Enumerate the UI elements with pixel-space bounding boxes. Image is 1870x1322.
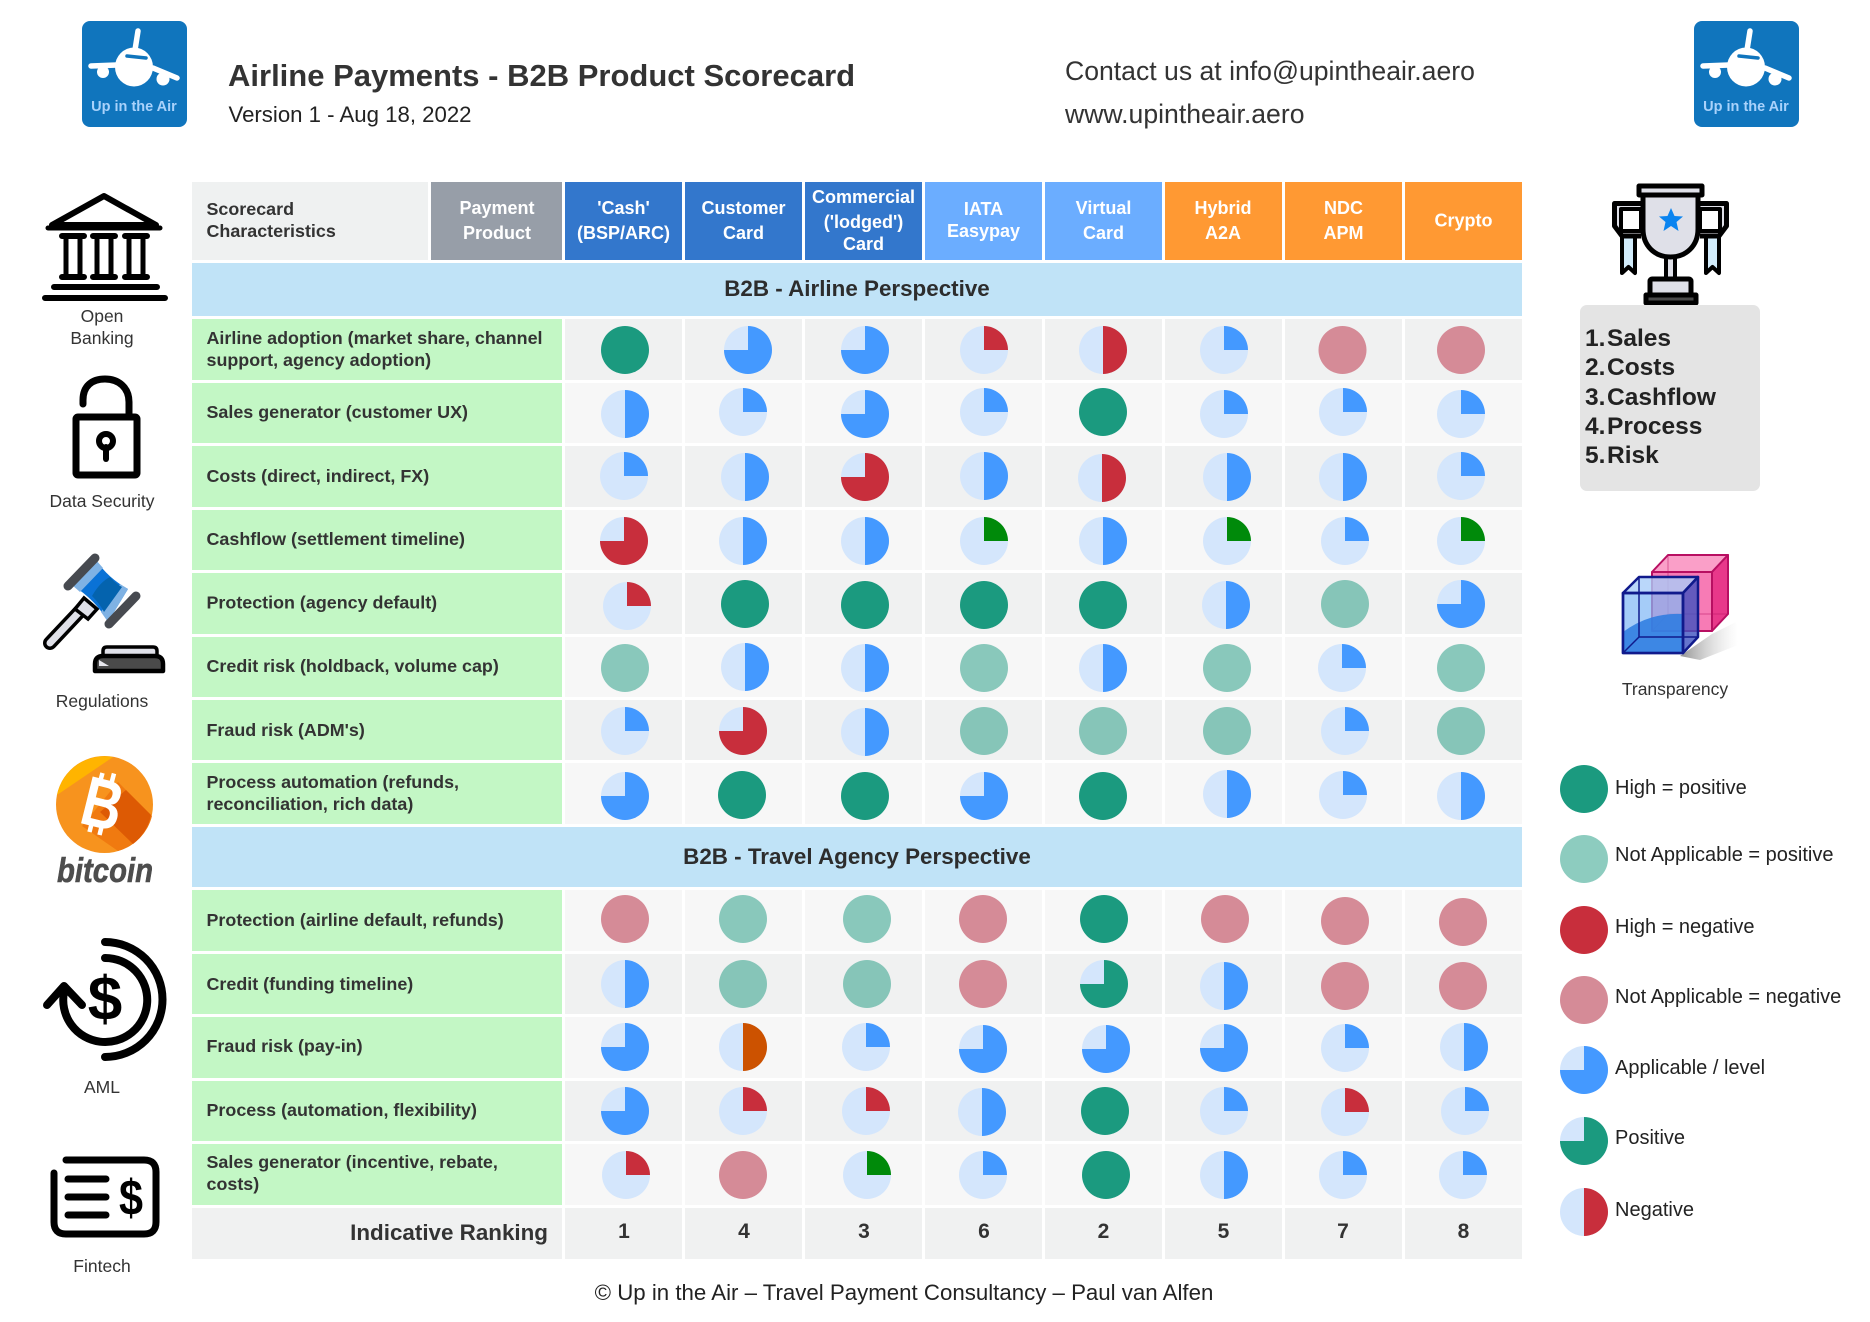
legend item: Not Applicable = positive: Not Applicable = positive (1615, 844, 1833, 866)
pie: high positive (601, 326, 649, 374)
pie: quarter level (1200, 326, 1248, 374)
pie: three quarter level (841, 326, 889, 374)
row: Indicative Ranking: 6 (978, 1220, 990, 1243)
pie: not applicable positive (1437, 707, 1485, 755)
header: Hybrid A2A: Hybrid (1194, 198, 1252, 218)
legend item: Not Applicable = positive (1560, 835, 1833, 883)
caption: Transparency: Transparency (1622, 679, 1728, 699)
icon: transparency cubes (1623, 555, 1738, 660)
pie: half negative (1079, 326, 1127, 374)
subtitle: version: Version 1 - Aug 18, 2022 (228, 102, 472, 127)
pie: high positive (718, 771, 766, 819)
pie: half level (601, 390, 649, 438)
pie: not applicable negative (601, 895, 649, 943)
pie: quarter level (1321, 1024, 1369, 1072)
pie: quarter negative (719, 1087, 767, 1135)
header: IATA Easypay: IATA (964, 199, 1003, 219)
pie: high positive (1081, 1087, 1129, 1135)
header: NDC APM: NDC (1324, 198, 1363, 218)
pie: half level (1202, 581, 1250, 629)
pie: not applicable negative (959, 895, 1007, 943)
row: Process automation flexibility: Process (automation, flexibility) (206, 1100, 477, 1120)
pie: not applicable positive (1203, 644, 1251, 692)
logo: Up in the Air (right) (1694, 21, 1799, 127)
pie: three quarter level (601, 772, 649, 820)
header: Cash: 'Cash' (597, 198, 650, 218)
pie: not applicable positive (843, 960, 891, 1008)
panel: criteria list: 2. (1585, 354, 1605, 381)
pie: not applicable negative (1201, 895, 1249, 943)
pie: quarter level (1437, 390, 1485, 438)
pie: half level (958, 1088, 1006, 1136)
pie: three quarter level (1082, 1025, 1130, 1073)
row: Airline adoption (192, 319, 1522, 380)
pie: quarter negative (602, 1151, 650, 1199)
pie: not applicable positive (1203, 707, 1251, 755)
legend item: Negative (1560, 1188, 1694, 1236)
panel: criteria list: 1. (1585, 325, 1605, 352)
icon: fintech: $ (119, 1170, 143, 1226)
row: Fraud risk pay-in (192, 1017, 1522, 1078)
icon: data security (76, 379, 137, 475)
pie: quarter level (959, 1151, 1007, 1199)
pie: high positive (841, 772, 889, 820)
pie: quarter level (600, 452, 648, 500)
icon: bitcoin: B (74, 761, 132, 847)
pie: high positive (1079, 772, 1127, 820)
pie: not applicable positive (601, 644, 649, 692)
row: Indicative Ranking: 1 (618, 1220, 630, 1243)
header: Payment Product (431, 182, 562, 260)
caption: Regulations: Regulations (56, 691, 148, 711)
row: Airline adoption: support, agency adoption) (206, 350, 431, 370)
pie: half level (841, 517, 889, 565)
header: Scorecard Characteristics: Scorecard (206, 199, 294, 219)
pie: quarter level (1321, 707, 1369, 755)
header: Payment Product: Payment (459, 198, 535, 218)
pie: quarter level (1441, 1087, 1489, 1135)
pie: three quarter level (601, 1023, 649, 1071)
panel: criteria list: 3. (1585, 384, 1605, 411)
pie: not applicable positive (1321, 580, 1369, 628)
row: Sales generator incentive (192, 1144, 1522, 1205)
caption: Open Banking: Open (81, 306, 123, 326)
pie: half level (841, 708, 889, 756)
row: Fraud risk ADM (192, 700, 1522, 760)
header: Crypto (1405, 182, 1522, 260)
pie: not applicable negative (1439, 962, 1487, 1010)
logo: Up in the Air (left) (82, 21, 187, 127)
caption: Fintech: Fintech (73, 1256, 131, 1276)
row: Costs: Costs (direct, indirect, FX) (206, 466, 429, 486)
pie: not applicable negative (1321, 897, 1369, 945)
pie: half level (1079, 644, 1127, 692)
pie: three quarter positive (1080, 960, 1128, 1008)
header: Hybrid A2A (1165, 182, 1282, 260)
pie: half level (721, 453, 769, 501)
row: Sales generator incentive: Sales generator (incentive, rebate, (206, 1152, 498, 1172)
row: Process automation: reconciliation, rich data) (206, 794, 413, 814)
pie: not applicable positive (1079, 707, 1127, 755)
pie: quarter positive (843, 1151, 891, 1199)
row: Credit funding timeline (192, 954, 1522, 1014)
pie: not applicable negative (1318, 326, 1366, 374)
legend item: High = positive: High = positive (1615, 777, 1747, 799)
pie: half level (1203, 453, 1251, 501)
row: Fraud risk pay-in: Fraud risk (pay-in) (206, 1036, 363, 1056)
pie: high positive (1079, 388, 1127, 436)
pie: not applicable positive (1437, 644, 1485, 692)
pie: three quarter level (724, 326, 772, 374)
panel: criteria list: Process (1607, 413, 1702, 440)
row: Protection airline default: Protection (airline default, refunds) (206, 910, 504, 930)
header: Customer Card: Card (723, 223, 764, 243)
row: Protection agency default: Protection (agency default) (206, 592, 437, 612)
panel: criteria list: Costs (1607, 354, 1675, 381)
pie: not applicable negative (959, 960, 1007, 1008)
legend item: High = negative (1560, 906, 1755, 954)
section band: B2B - Airline Perspective (192, 263, 1522, 316)
pie: not applicable positive (843, 895, 891, 943)
pie: quarter level (842, 1023, 890, 1071)
pie: high positive (960, 581, 1008, 629)
pie: half level (601, 960, 649, 1008)
section band: B2B - Airline Perspective: B2B - Airline Perspective (724, 276, 990, 301)
pie: half orange (719, 1023, 767, 1071)
header: Commercial lodged Card: ('lodged') (824, 212, 903, 232)
icon: open banking (45, 196, 165, 298)
legend item: High = positive (1560, 765, 1747, 813)
header: Virtual Card (1045, 182, 1162, 260)
pie: half level (1079, 517, 1127, 565)
header row (192, 182, 1522, 260)
pie: half level (841, 644, 889, 692)
pie: high positive (721, 580, 769, 628)
pie: quarter level (1319, 771, 1367, 819)
row: Sales generator: Sales generator (customer UX) (206, 402, 468, 422)
pie: half level (1200, 1151, 1248, 1199)
website: www.upintheair.aero (1064, 99, 1304, 129)
pie: quarter level (1321, 517, 1369, 565)
pie: quarter positive (960, 517, 1008, 565)
caption: Open Banking: Banking (70, 328, 134, 348)
pie: three quarter negative (600, 517, 648, 565)
logo: Up in the Air (right): Up in the Air (1703, 99, 1789, 115)
legend item: Positive (1560, 1117, 1685, 1165)
pie: half level (1203, 770, 1251, 818)
header: Payment Product: Product (463, 223, 531, 243)
row: Airline adoption: Airline adoption (market share, channel (206, 328, 543, 348)
row: Credit funding timeline: Credit (funding timeline) (206, 974, 413, 994)
row: Process automation flexibility (192, 1081, 1522, 1141)
legend item: Not Applicable = negative (1560, 976, 1841, 1024)
pie: half level (1200, 962, 1248, 1010)
row: Indicative Ranking: Indicative Ranking (350, 1220, 548, 1245)
pie: three quarter level (841, 390, 889, 438)
legend item: Positive: Positive (1615, 1127, 1685, 1149)
pie: three quarter negative (841, 453, 889, 501)
pie: not applicable negative (1439, 898, 1487, 946)
pie: half level (1440, 1023, 1488, 1071)
row: Fraud risk ADM: Fraud risk (ADM's) (206, 720, 365, 740)
icon: fintech (54, 1160, 156, 1234)
pie: high positive (1079, 581, 1127, 629)
footer credit: © Up in the Air – Travel Payment Consultancy – Paul van Alfen (595, 1280, 1213, 1305)
legend (1560, 765, 1841, 1236)
header: Virtual Card: Virtual (1076, 198, 1131, 218)
pie: high positive (1082, 1151, 1130, 1199)
pie: high positive (1080, 895, 1128, 943)
icon: AML: $ (88, 965, 122, 1034)
contact email: Contact us at info@upintheair.aero (1065, 56, 1475, 86)
pie: three quarter level (1437, 580, 1485, 628)
pie: not applicable positive (960, 644, 1008, 692)
icon: bitcoin: bitcoin (57, 852, 153, 890)
caption: AML: AML (84, 1077, 120, 1097)
row: Protection agency default (192, 573, 1522, 634)
row: Costs (192, 446, 1522, 507)
header: Commercial lodged Card: Card (843, 234, 884, 254)
pie: quarter level (601, 707, 649, 755)
pie: high positive (841, 581, 889, 629)
header: Cash (565, 182, 682, 260)
pie: quarter level (1437, 452, 1485, 500)
row: Credit risk: Credit risk (holdback, volume cap) (206, 656, 499, 676)
pie: quarter negative (842, 1087, 890, 1135)
panel: criteria list: Cashflow (1607, 384, 1717, 411)
pie: half level (719, 517, 767, 565)
title: Airline Payments - B2B Product Scorecard (228, 58, 855, 93)
pie: quarter negative (1321, 1088, 1369, 1136)
row: Indicative Ranking (192, 1208, 1522, 1259)
panel: criteria list: Sales (1607, 325, 1671, 352)
pie: not applicable positive (719, 895, 767, 943)
caption: Data Security: Data Security (49, 491, 155, 511)
pie: not applicable negative (1437, 326, 1485, 374)
pie: three quarter level (960, 772, 1008, 820)
icon: AML (47, 942, 162, 1057)
pie: half level (721, 643, 769, 691)
pie: quarter level (960, 388, 1008, 436)
row: Sales generator incentive: costs) (206, 1174, 259, 1194)
row: Indicative Ranking: 8 (1458, 1220, 1470, 1243)
row: Protection airline default (192, 890, 1522, 951)
row: Process automation: Process automation (refunds, (206, 772, 459, 792)
pie: not applicable positive (719, 960, 767, 1008)
pie: quarter level (1439, 1151, 1487, 1199)
logo: Up in the Air (left): Up in the Air (91, 99, 177, 115)
header: Scorecard Characteristics: Characteristics (206, 221, 336, 241)
row: Credit risk (192, 637, 1522, 697)
header: Hybrid A2A: A2A (1205, 223, 1241, 243)
row: Indicative Ranking: 3 (858, 1220, 870, 1243)
header: Crypto: Crypto (1434, 210, 1493, 230)
pie: three quarter level (601, 1087, 649, 1135)
icon: trophy (1614, 186, 1726, 303)
legend item: Applicable / level: Applicable / level (1615, 1057, 1765, 1079)
legend item: High = negative: High = negative (1615, 916, 1755, 938)
panel: criteria list: 4. (1585, 413, 1605, 440)
pie: quarter level (1318, 644, 1366, 692)
header: Customer Card: Customer (701, 198, 786, 218)
panel: criteria list (1580, 305, 1760, 491)
header: NDC APM: APM (1324, 223, 1364, 243)
pie: quarter negative (960, 326, 1008, 374)
pie: half negative (1078, 454, 1126, 502)
pie: quarter level (1319, 1151, 1367, 1199)
header: IATA Easypay (925, 182, 1042, 260)
pie: quarter positive (1437, 517, 1485, 565)
icon: bitcoin (56, 756, 153, 890)
legend item: Not Applicable = negative: Not Applicable = negative (1615, 986, 1841, 1008)
legend item: Negative: Negative (1615, 1199, 1694, 1221)
pie: three quarter level (1200, 1024, 1248, 1072)
row: Indicative Ranking: 2 (1098, 1220, 1109, 1243)
header: Customer Card (685, 182, 802, 260)
header: Cash: (BSP/ARC) (577, 223, 670, 243)
section band: B2B - Travel Agency Perspective (192, 827, 1522, 887)
header: IATA Easypay: Easypay (947, 221, 1020, 241)
header: Commercial lodged Card: Commercial (812, 187, 915, 207)
header: Virtual Card: Card (1083, 223, 1124, 243)
header: Scorecard Characteristics (192, 182, 428, 260)
header: Commercial lodged Card (805, 182, 922, 260)
pie: quarter level (1319, 388, 1367, 436)
pie: quarter level (719, 388, 767, 436)
panel: criteria list: Risk (1607, 442, 1659, 469)
row: Process automation (192, 763, 1522, 824)
pie: quarter level (1200, 390, 1248, 438)
row: Indicative Ranking: 5 (1218, 1220, 1230, 1243)
pie: not applicable negative (719, 1151, 767, 1199)
legend item: Applicable / level (1560, 1046, 1765, 1094)
pie: three quarter level (959, 1025, 1007, 1073)
pie: half level (1437, 772, 1485, 820)
section band: B2B - Travel Agency Perspective: B2B - Travel Agency Perspective (683, 844, 1031, 869)
pie: three quarter negative (719, 707, 767, 755)
row: Cashflow: Cashflow (settlement timeline) (206, 529, 465, 549)
row: Sales generator (192, 383, 1522, 443)
pie: not applicable positive (960, 707, 1008, 755)
row: Indicative Ranking: 4 (738, 1220, 750, 1243)
pie: quarter level (1200, 1087, 1248, 1135)
pie: half level (1319, 453, 1367, 501)
pie: quarter negative (603, 582, 651, 630)
panel: criteria list: 5. (1585, 442, 1605, 469)
row: Indicative Ranking: 7 (1337, 1220, 1349, 1243)
pie: quarter positive (1203, 517, 1251, 565)
icon: regulations gavel (50, 558, 163, 671)
pie: half level (960, 452, 1008, 500)
header: NDC APM (1285, 182, 1402, 260)
pie: not applicable negative (1321, 962, 1369, 1010)
row: Cashflow (192, 510, 1522, 570)
